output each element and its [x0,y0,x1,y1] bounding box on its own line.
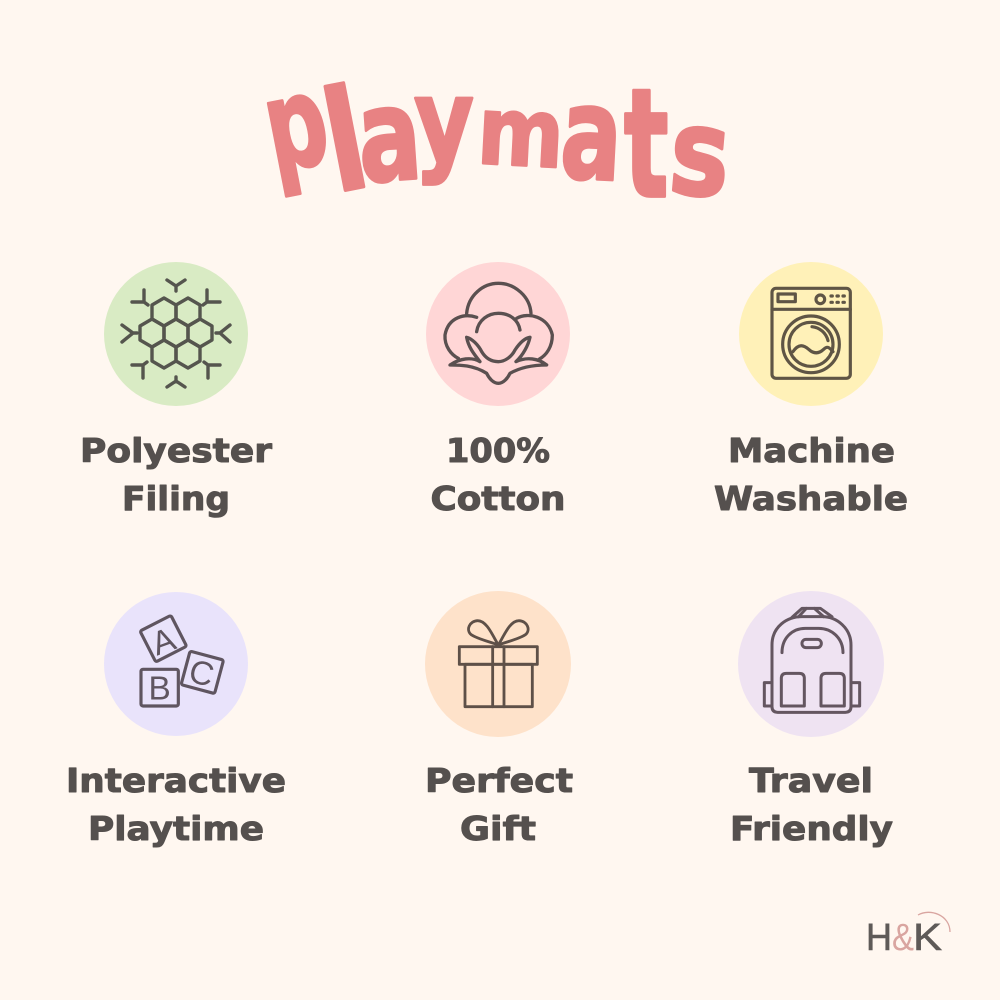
panel: cotton [426,262,570,518]
label: Machine [728,431,895,470]
logo: H&K: H [866,917,892,959]
label: Travel [749,761,873,800]
logo: H&K [866,912,950,959]
label: Gift [460,809,536,848]
icon circle: yellow [739,262,883,406]
label [714,431,908,518]
label [425,761,573,848]
title: p [252,48,340,202]
icon circle: mauve [738,591,884,737]
label [66,761,286,848]
title [252,48,736,232]
label: Polyester [80,431,273,470]
icon: alphabet blocks: C [185,653,218,695]
label: Washable [714,479,908,518]
title: t [624,58,668,232]
label [430,431,566,518]
panel: polyester filing [80,262,273,518]
label: Perfect [425,761,573,800]
title: a [557,59,626,211]
label: Interactive [66,761,286,800]
label [730,761,893,848]
icon: honeycomb [122,280,230,387]
label [80,431,273,518]
title: s [664,82,736,226]
icon: alphabet blocks: B [149,671,171,708]
title: y [414,56,474,187]
title: a [353,60,426,213]
label: Cotton [430,479,566,518]
logo: H&K: K [913,917,942,959]
icon: cotton boll [445,283,552,383]
panel: machine washable [714,262,908,518]
logo: H&K: & [892,917,914,959]
icon: alphabet blocks: A [147,621,181,663]
icon circle: pink [426,262,570,406]
title: l [311,59,379,225]
panel: travel friendly [730,591,893,848]
icon: gift box [459,621,537,707]
title: m [475,76,567,191]
panel: interactive playtime [66,592,286,848]
label: Playtime [88,809,264,848]
icon: alphabet blocks [140,615,224,708]
icon circle: orange [425,591,571,737]
label: Friendly [730,809,893,848]
icon: washing machine [772,288,850,378]
icon circle: green [104,262,248,406]
icon: backpack [764,608,860,712]
icon circle: purple [104,592,248,736]
label: Filing [122,479,230,518]
panel: perfect gift [425,591,573,848]
label: 100% [446,431,550,470]
